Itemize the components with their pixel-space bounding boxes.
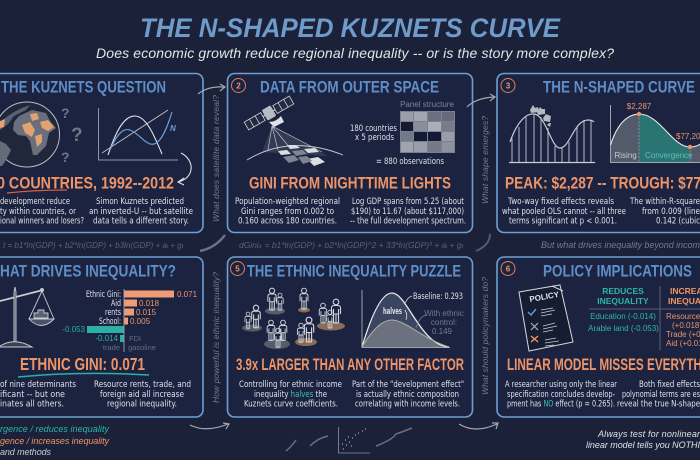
icon: question marks xyxy=(61,105,83,165)
text block: left xyxy=(235,196,340,226)
formula row: t = b1*ln(GDP) + b2*ln(GDP) + b3ln(GDP) + aᵢ + gₜ xyxy=(3,240,184,250)
text block: right xyxy=(352,379,464,408)
arrow: panel 2 to 3 xyxy=(467,94,495,107)
closing note: linear model tells you NOTHI xyxy=(586,440,700,450)
chart: N-shaped curve: Convergence xyxy=(645,151,693,160)
panel: policy implications xyxy=(497,257,700,417)
text block: left: pment has NO effect (p = 0.265). xyxy=(507,398,615,408)
chart: three curve shapes xyxy=(98,108,178,160)
bar chart: determinants: 0.071 xyxy=(177,290,198,299)
icon: globe xyxy=(0,102,60,167)
text: sample size xyxy=(350,123,397,142)
text block: left: terms significant at p < 0.001. xyxy=(509,216,617,226)
icon: small scatter plot xyxy=(338,427,370,453)
text: sample size: x 5 periods xyxy=(355,132,394,142)
text block: right xyxy=(94,379,191,408)
text block: left xyxy=(0,379,76,408)
number badge 2: 2 xyxy=(236,82,241,90)
text block: left: ty within countries, or xyxy=(0,206,76,216)
text block: right xyxy=(89,196,193,226)
chart: N-shaped curve: $2,287 xyxy=(627,102,652,111)
arrow: panel 4 to 5 xyxy=(190,423,229,429)
table: policy levers: Trade (+0 xyxy=(666,330,700,339)
table: policy levers: Education (-0.014) xyxy=(590,312,656,321)
bar chart: determinants: School: xyxy=(99,316,121,326)
number badge 3: 3 xyxy=(506,82,511,90)
text block: right: data tells a different story. xyxy=(93,216,189,226)
number badge 2 xyxy=(232,78,246,92)
chart: Gini distribution before and after xyxy=(362,290,464,348)
text block: left xyxy=(0,196,84,226)
heading: puzzle: THE ETHNIC INEQUALITY PUZZLE xyxy=(247,262,461,280)
text block: left xyxy=(502,196,626,226)
icon: policy document xyxy=(519,285,573,351)
bar chart: determinants: 0.015 xyxy=(136,308,157,317)
icon: question marks: ? xyxy=(61,105,70,121)
text block: right: correlating with income levels. xyxy=(355,398,460,408)
text block: left: Two-way fixed effects reveals xyxy=(507,196,614,206)
underline swoosh xyxy=(18,373,149,377)
icon: question marks: ? xyxy=(61,149,70,165)
wisp xyxy=(476,234,490,251)
text block: right: Part of the "development effect" xyxy=(352,379,464,389)
bar chart: determinants: Ethnic Gini: xyxy=(86,289,121,299)
panel: N-shaped curve xyxy=(497,74,700,232)
icon: satellite over earth xyxy=(243,95,343,166)
closing note: Always test for nonlinear xyxy=(597,429,700,439)
table: policy levers: INEQUALITY xyxy=(597,296,649,306)
stat: countries: 0 COUNTRIES, 1992--2012 xyxy=(0,174,174,192)
table: policy levers: Resource xyxy=(666,312,700,321)
closing note xyxy=(586,429,700,450)
chart: N-shaped curve xyxy=(610,102,700,162)
formula row: dGiniᵢₜ = b1*ln(GDP) + b2*ln(GDP)^2 + 33*ln(GDP)³ + aᵢ + gₜ xyxy=(239,240,464,250)
heading: Kuznets question: THE KUZNETS QUESTION xyxy=(1,78,166,96)
bar chart: determinants: 0.018 xyxy=(139,299,160,308)
chart: Gini distribution before and after: control: xyxy=(431,318,457,327)
wisp xyxy=(200,235,225,251)
arrow: panel 1 to 2 xyxy=(198,84,225,94)
stat: ethnic Gini: ETHNIC GINI: 0.071 xyxy=(20,354,145,374)
text block: left: specification concludes develop- xyxy=(507,389,615,399)
bar chart: determinants: gasoline xyxy=(128,343,156,352)
text block: right xyxy=(350,196,466,226)
bar chart: determinants: Aid xyxy=(111,298,121,308)
number badge 5: 5 xyxy=(235,264,240,274)
arrow: curved to stat xyxy=(178,153,191,185)
legend: and methods xyxy=(0,447,52,457)
side question 1: What does satellite data reveal? xyxy=(211,95,221,222)
text block: left: ional winners and losers? xyxy=(0,216,84,226)
number badge 6: 6 xyxy=(506,264,511,274)
text block: left: of nine determinants xyxy=(0,379,76,389)
panel: ethnic inequality puzzle xyxy=(228,257,472,417)
icon: balance scale xyxy=(0,287,54,347)
text block: left: what pooled OLS cannot -- all three xyxy=(502,206,626,216)
bar chart: determinants: 0.005 xyxy=(130,317,151,326)
text block: left: development reduce xyxy=(0,196,70,206)
chart: Gini distribution before and after: 0.149 xyxy=(432,327,453,336)
number badge 6 xyxy=(501,262,515,276)
text block: right: $190) to 11.67 (about $117,000) xyxy=(351,206,464,216)
icon: policy document: POLICY xyxy=(529,290,560,304)
text block: left: A researcher using only the linear xyxy=(505,379,617,389)
text: sample size: 180 countries xyxy=(350,123,397,133)
bar chart: determinants: rents xyxy=(105,307,121,317)
text block: left: Controlling for ethnic income xyxy=(239,379,342,389)
bar chart: determinants: -0.014 xyxy=(95,334,119,343)
wisps xyxy=(286,428,412,451)
text block: left xyxy=(239,379,342,408)
text block: right: an inverted-U -- but satellite xyxy=(89,206,193,216)
panel: data from outer space xyxy=(228,74,472,232)
side question 4: What should policymakers do? xyxy=(480,277,490,395)
bar chart: determinants xyxy=(62,289,198,352)
title: THE N-SHAPED KUZNETS CURVE xyxy=(140,13,561,43)
text block: right: Resource rents, trade, and xyxy=(94,379,191,389)
text block: left: inates all others. xyxy=(0,398,64,408)
legend: gence / increases inequality xyxy=(0,436,110,446)
arrow: panel 5 to 6 xyxy=(459,423,498,429)
text block: right xyxy=(617,379,700,408)
panel grid xyxy=(400,111,455,153)
chart: Gini distribution before and after: halves xyxy=(383,306,402,316)
text: observations: = 880 observations xyxy=(376,156,444,166)
text block: right: Simon Kuznets predicted xyxy=(96,196,184,206)
bar chart: determinants: trade xyxy=(103,343,120,352)
text block: right: is actually ethnic composition xyxy=(356,389,459,399)
text block: left: ificant -- but one xyxy=(0,389,65,399)
chart: Gini distribution before and after: With ethnic xyxy=(424,309,464,318)
bar chart: determinants: FDI xyxy=(129,334,141,343)
table: policy levers: Arable land (-0.053) xyxy=(588,324,659,333)
chart: N-shaped curve: $77,20 xyxy=(676,132,700,141)
legend: rgence / reduces inequality xyxy=(0,424,110,434)
panel: the Kuznets question xyxy=(0,74,203,232)
table: policy levers xyxy=(588,286,700,350)
side question 2: What shape emerges? xyxy=(480,116,490,204)
side question 3: How powerful is ethnic inequality? xyxy=(211,272,221,403)
text block: left xyxy=(505,379,617,408)
formula row: But what drives inequality beyond incom xyxy=(541,240,700,250)
panel: what drives inequality xyxy=(0,257,203,417)
text block: right: Log GDP spans from 5.25 (about xyxy=(352,196,465,206)
bar chart: determinants: -0.053 xyxy=(62,325,86,334)
icon: question marks: ? xyxy=(71,125,83,146)
text block: right xyxy=(629,196,700,226)
chart: Gini distribution before and after: Baseline: 0.293 xyxy=(413,291,463,301)
icon: groups of people xyxy=(242,288,345,349)
number badge 5 xyxy=(230,262,244,276)
heading: outer space: DATA FROM OUTER SPACE xyxy=(260,78,439,96)
text block: right: foreign aid all increase xyxy=(100,389,184,399)
text block: right: -- the full development spectrum. xyxy=(350,216,466,226)
text block: left: Population-weighted regional xyxy=(235,196,340,206)
subtitle: Does economic growth reduce regional inequality -- or is the story more complex? xyxy=(96,45,614,61)
chart: three curve shapes: N xyxy=(170,124,176,133)
formula row xyxy=(3,240,700,250)
text block: left: inequality halves the xyxy=(254,389,327,399)
number badge 3 xyxy=(501,78,515,92)
stat: 3.9x larger: 3.9x LARGER THAN ANY OTHER FACTOR xyxy=(236,356,464,374)
text block: left: Kuznets curve coefficients. xyxy=(244,398,338,408)
legend xyxy=(0,424,110,457)
text block: left: 0.160 across 180 countries. xyxy=(238,216,337,226)
icon: roller coaster xyxy=(509,105,595,162)
table: policy levers: REDUCES xyxy=(602,286,644,296)
text block: left: Gini ranges from 0.002 to xyxy=(241,206,334,216)
underline swoosh xyxy=(7,190,67,193)
chart: N-shaped curve: Rising xyxy=(614,151,637,160)
stat: Gini from nighttime lights: GINI FROM NIGHTTIME LIGHTS xyxy=(249,174,451,192)
heading: drivers: HAT DRIVES INEQUALITY? xyxy=(0,262,176,280)
text block: right: regional inequality. xyxy=(107,398,177,408)
label: panel structure: Panel structure xyxy=(400,100,454,109)
